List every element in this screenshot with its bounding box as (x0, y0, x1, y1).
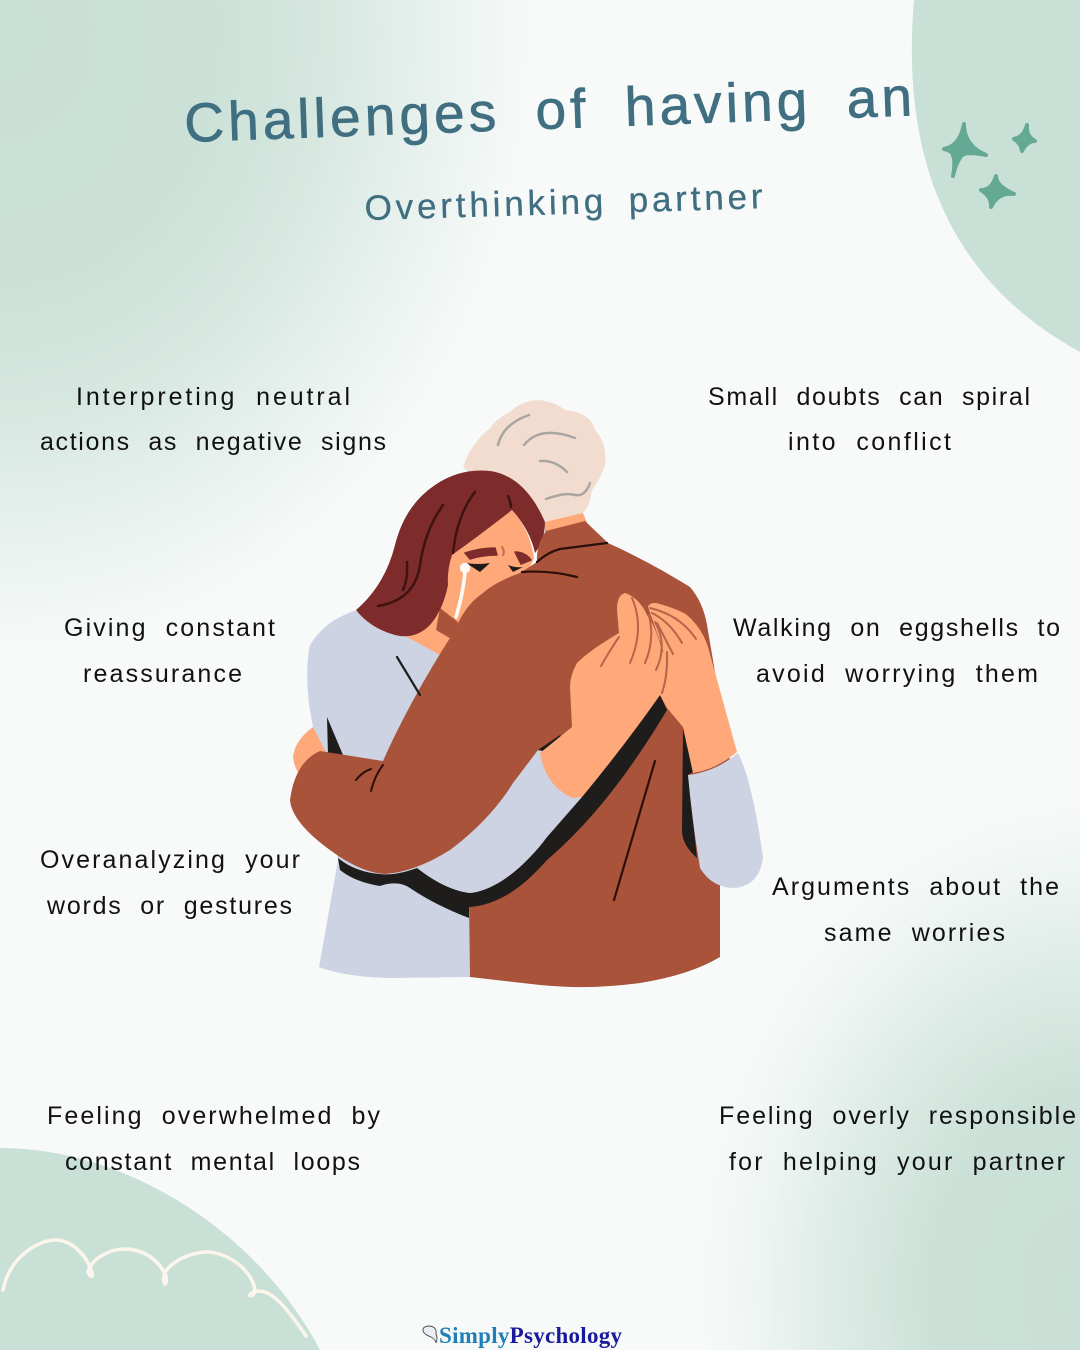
hair strands (378, 492, 511, 606)
title: Challenges of having an (183, 65, 913, 154)
man's neck (545, 513, 590, 545)
right forearm and hand (648, 603, 737, 773)
finger lines (601, 598, 696, 693)
text: small doubts (708, 383, 1030, 456)
text: overwhelmed (47, 1102, 380, 1176)
text: neutral actions (40, 383, 386, 456)
woman's far hand (293, 727, 330, 775)
eyebrows (465, 548, 531, 564)
background glow: top left (0, 0, 620, 700)
text: reassurance (64, 614, 275, 688)
woman's sweater torso (307, 610, 480, 978)
woman's hands and forearms (540, 593, 737, 798)
woman's right sleeve (688, 753, 763, 888)
illustration: hugging couple (290, 400, 763, 987)
text: overwhelmed: constant mental loops (65, 1148, 360, 1176)
dark lining wedge (327, 717, 343, 755)
text: arguments: same worries (824, 919, 1005, 947)
text: arguments (772, 873, 1059, 947)
man's jacket (469, 521, 730, 987)
text: reassurance: Giving constant (64, 614, 275, 642)
elbow creases (356, 765, 383, 791)
text: eggshells (733, 614, 1060, 688)
scarf band (436, 608, 458, 640)
sweater line (397, 657, 420, 695)
text: overanalyzing: words or gestures (46, 892, 292, 920)
man's arm (290, 573, 600, 874)
text: overanalyzing: Overanalyzing your (40, 846, 300, 874)
dark patch near arm (538, 688, 564, 752)
woman's sleeve forearm (418, 750, 582, 893)
background glow: bottom right (660, 780, 1080, 1350)
text: overanalyzing (40, 846, 300, 920)
text: eggshells: Walking on eggshells to (733, 614, 1060, 642)
text: overwhelmed: Feeling overwhelmed by (47, 1102, 380, 1130)
left forearm and hand (540, 593, 664, 798)
text: responsible: for helping your partner (729, 1148, 1065, 1176)
text: small doubts: Small doubts can spiral (708, 383, 1030, 411)
brow crease (502, 547, 504, 555)
text: neutral actions: actions as negative signs (40, 428, 386, 456)
closed eyes (466, 563, 523, 572)
right dark lining (682, 728, 697, 858)
black strap shadow (338, 695, 667, 918)
decorative blob: bottom left (0, 1148, 320, 1350)
logo: Simply Psychology (423, 1323, 622, 1348)
tear drop (460, 563, 470, 573)
right column text (708, 383, 1076, 1176)
face and neck (405, 510, 534, 655)
text: arguments: Arguments about the (772, 873, 1059, 901)
subtitle: Overthinking partner (364, 177, 763, 228)
text: responsible: Feeling overly responsible (719, 1102, 1076, 1130)
text: reassurance: reassurance (83, 660, 242, 688)
woman's head (356, 471, 545, 655)
icon: sparkles (944, 124, 1035, 207)
text: neutral actions: Interpreting neutral (76, 383, 350, 411)
left column text (40, 383, 386, 1176)
text: eggshells: avoid worrying them (756, 660, 1038, 688)
decorative blob: top right (912, 0, 1080, 352)
jacket collar lines (522, 543, 655, 900)
logo wordmark: SimplyPsychology (439, 1323, 622, 1348)
tear (456, 570, 465, 617)
man's hair (463, 400, 606, 522)
woman's hair (356, 471, 545, 636)
text: responsible (719, 1102, 1076, 1176)
text: small doubts: into conflict (788, 428, 951, 456)
icon: head (423, 1326, 437, 1343)
icon: scalloped line (3, 1240, 306, 1336)
